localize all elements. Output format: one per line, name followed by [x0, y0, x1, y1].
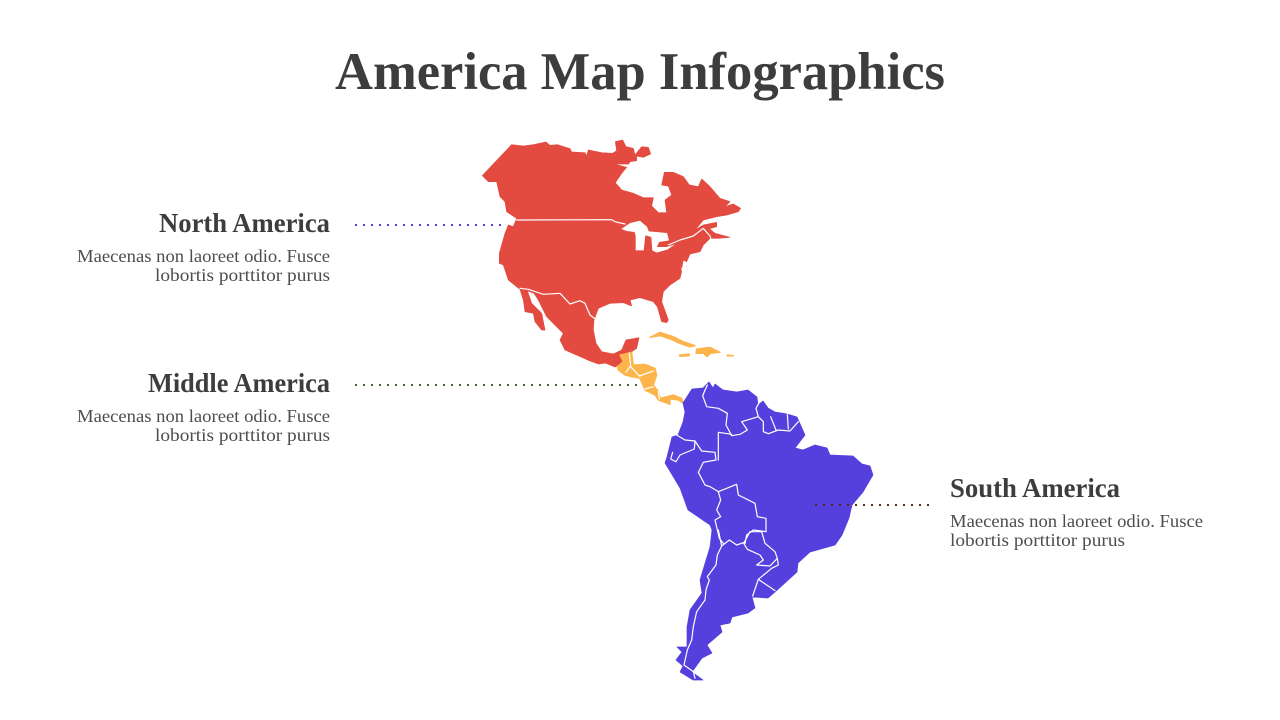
borders: northern South America	[671, 385, 798, 543]
callout: Middle America	[77, 368, 640, 445]
text: North America description	[77, 246, 330, 285]
text: South America description	[950, 511, 1203, 550]
text: South America description: Maecenas non laoreet odio. Fusce	[950, 511, 1203, 531]
text: South America description: lobortis porttitor purus	[950, 530, 1125, 550]
borders: southern South America	[684, 530, 778, 678]
text: North America description: Maecenas non laoreet odio. Fusce	[77, 246, 330, 266]
text: North America description: lobortis porttitor purus	[155, 265, 330, 285]
border: Canada and United States	[517, 220, 711, 245]
borders: Central American countries	[626, 353, 659, 399]
map: South America	[665, 382, 873, 680]
dotted leader: South America	[815, 504, 931, 506]
callout: North America	[77, 208, 506, 285]
text: Middle America description: lobortis porttitor purus	[155, 425, 330, 445]
text: Middle America description: Maecenas non laoreet odio. Fusce	[77, 406, 330, 426]
heading: Middle America: Middle America	[148, 368, 330, 398]
map: Middle America	[617, 332, 733, 404]
dotted leader: North America	[355, 224, 506, 226]
map: North America	[482, 140, 741, 367]
border: United States and Mexico	[520, 288, 597, 320]
callout: South America	[815, 473, 1203, 550]
text: Middle America description	[77, 406, 330, 445]
title: America Map Infographics	[335, 43, 945, 101]
heading: North America: North America	[159, 208, 330, 238]
heading: South America: South America	[950, 473, 1120, 503]
dotted leader: Middle America	[355, 384, 640, 386]
